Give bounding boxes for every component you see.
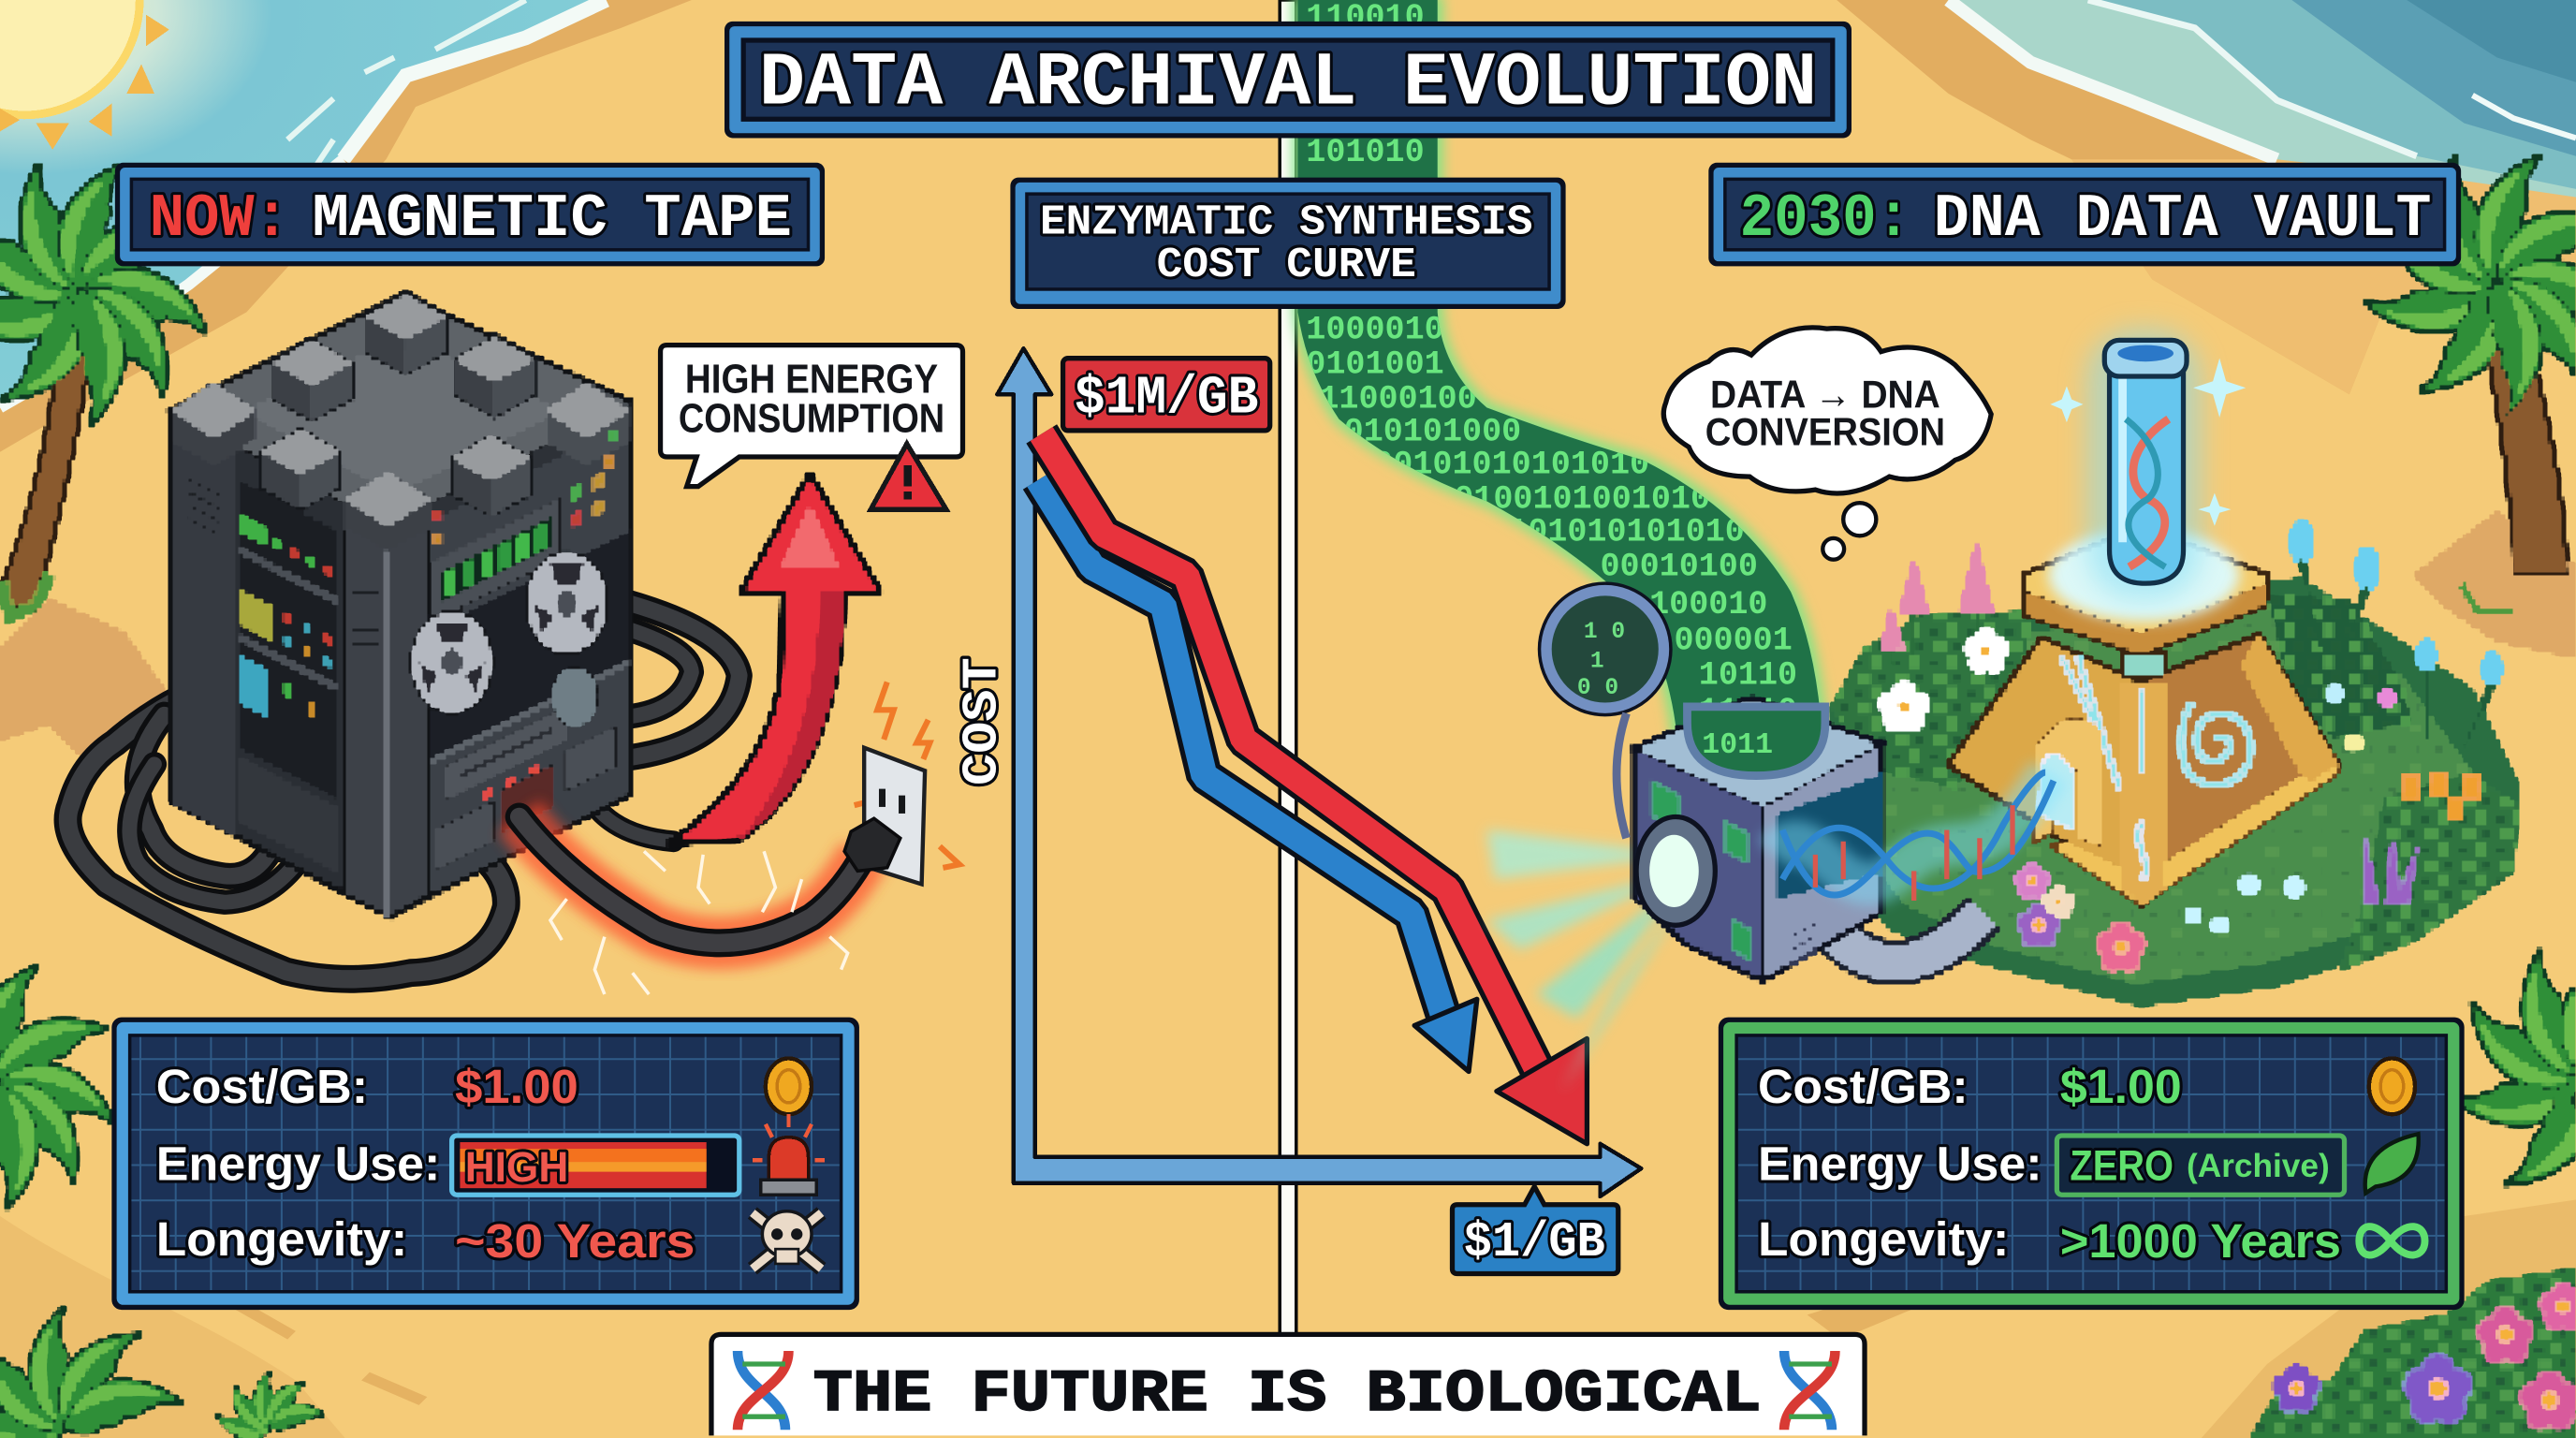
cyan swirl xyxy=(2062,657,2251,879)
chart: cost curve xyxy=(955,348,1641,1273)
header: 2030 dna data vault: DNA DATA VAULT xyxy=(1934,184,2432,254)
arch door xyxy=(2036,718,2101,846)
chart heading: enzymatic synthesis cost curve: ENZYMATIC SYNTHESIS xyxy=(1040,198,1533,246)
hot power cable with glow and wall outlet xyxy=(520,682,959,994)
left face racks xyxy=(172,411,337,888)
magnetic tape server tower xyxy=(172,291,629,916)
energy badge: zero: ZERO xyxy=(2070,1141,2174,1189)
binary data ribbon: 11000100 xyxy=(1319,380,1477,418)
intake ring with data stream: 1011 xyxy=(1702,729,1773,762)
icon: wall outlet xyxy=(844,748,925,884)
binary data ribbon xyxy=(1298,0,1823,766)
icon: siren xyxy=(753,1114,825,1195)
tag: $1/GB: $1/GB xyxy=(1464,1214,1605,1270)
binary data ribbon: 10101010101010 xyxy=(1469,514,1745,551)
golden pedestal xyxy=(1950,529,2338,903)
binary data ribbon: 10110 xyxy=(1699,656,1797,694)
row: cost: Cost/GB: xyxy=(1758,1060,1969,1113)
header: now magnetic tape: MAGNETIC TAPE xyxy=(312,184,792,254)
row: longevity xyxy=(1758,1212,2425,1268)
binary data ribbon: 000001 xyxy=(1674,622,1793,659)
binary data ribbon: 0101001 xyxy=(1306,345,1444,383)
top deck xyxy=(172,296,629,529)
footer banner: the future is biological xyxy=(711,1334,1865,1435)
thought dots xyxy=(1843,503,1876,536)
stat panel: magnetic tape xyxy=(111,1018,859,1310)
light beams from machine lens xyxy=(1486,829,1692,1093)
thought bubble: data to dna conversion: CONVERSION xyxy=(1705,410,1945,454)
energy badge: zero xyxy=(2056,1136,2345,1195)
glowing test tube with dna xyxy=(2049,329,2246,622)
binary data ribbon: 010101000 xyxy=(1344,413,1521,450)
title banner xyxy=(724,22,1852,138)
intake ring with data stream xyxy=(1687,707,1825,776)
header: now magnetic tape xyxy=(115,163,825,266)
icon: infinity xyxy=(2359,1226,2425,1255)
thought bubble: data to dna conversion: DATA → DNA xyxy=(1710,372,1940,416)
sparkles xyxy=(2050,359,2246,526)
energy badge: zero: (Archive) xyxy=(2187,1148,2330,1184)
magnifier scope xyxy=(1540,583,1671,838)
pipe xyxy=(1832,914,1983,962)
sea: top left with sun xyxy=(0,0,607,407)
garden island xyxy=(1832,521,2519,1005)
palm foliage: bottom right xyxy=(2450,939,2576,1211)
header: 2030 dna data vault xyxy=(1708,163,2461,266)
front pillar xyxy=(345,501,429,916)
machine box xyxy=(1634,698,1881,979)
corner pillar tops xyxy=(172,383,629,552)
palm tree: top left xyxy=(0,154,218,772)
flower bush: bottom right xyxy=(2250,1269,2576,1438)
header: now magnetic tape: NOW: xyxy=(150,184,289,254)
flowers xyxy=(1879,542,2479,972)
lens xyxy=(1636,816,1715,925)
palm foliage: bottom left xyxy=(0,956,325,1438)
magnifier scope: 0 0 xyxy=(1577,676,1618,701)
row: longevity: >1000 Years xyxy=(2060,1214,2341,1268)
top plate xyxy=(2026,529,2265,644)
binary data ribbon: 100101010101010 xyxy=(1354,447,1649,484)
tag: $1/GB xyxy=(1453,1186,1618,1273)
icon: electric sparks xyxy=(550,851,848,994)
row: cost: $1.00 xyxy=(2060,1060,2182,1113)
icon: leaf xyxy=(2365,1134,2419,1193)
icon: dna left xyxy=(738,1351,788,1430)
series: blue cost line xyxy=(1038,480,1477,1072)
title banner: DATA ARCHIVAL EVOLUTION xyxy=(759,42,1817,127)
row: longevity xyxy=(156,1211,822,1269)
dna strand inside tube xyxy=(2130,419,2169,567)
icon: coin xyxy=(2369,1058,2415,1114)
row: energy xyxy=(1758,1134,2419,1195)
icon: coin xyxy=(766,1058,812,1114)
binary data ribbon: 1000010 xyxy=(1306,312,1444,349)
series: red cost line xyxy=(1042,433,1587,1144)
centre divider line xyxy=(1280,0,1296,1340)
magnifier scope: 1 xyxy=(1590,650,1604,675)
binary data ribbon: 1010100101001010 xyxy=(1395,480,1710,518)
row: longevity: Longevity: xyxy=(1758,1212,2009,1266)
callout: high energy consumption xyxy=(661,345,962,509)
magnifier scope: 1 0 xyxy=(1584,620,1625,645)
row: cost xyxy=(1758,1058,2415,1114)
callout: high energy consumption: CONSUMPTION xyxy=(679,396,944,442)
row: cost xyxy=(156,1058,812,1114)
row: cost: Cost/GB: xyxy=(156,1060,368,1113)
icon: warning triangle xyxy=(871,444,946,509)
chart heading: enzymatic synthesis cost curve xyxy=(1010,178,1566,309)
emerging dna helix xyxy=(1775,772,2054,901)
base frame xyxy=(2054,756,2338,903)
right face xyxy=(386,403,629,916)
row: energy: Energy Use: xyxy=(1758,1137,2042,1190)
header: 2030 dna data vault: 2030: xyxy=(1740,184,1910,254)
glowing bulbs xyxy=(2185,521,2502,933)
chart axes xyxy=(997,348,1641,1196)
icon: skull and crossbones xyxy=(753,1211,822,1269)
footer banner: the future is biological: THE FUTURE IS BIOLOGICAL xyxy=(813,1360,1761,1428)
thought bubble: data to dna conversion xyxy=(1663,328,1991,560)
tag: $1M/GB: $1M/GB xyxy=(1075,369,1258,430)
binary data ribbon: 11110 xyxy=(1699,693,1797,730)
energy bar: high xyxy=(452,1136,739,1195)
crenellation cubes xyxy=(258,291,537,520)
binary data ribbon: 00010100 xyxy=(1600,548,1758,585)
row: cost: $1.00 xyxy=(455,1060,578,1113)
callout: high energy consumption: HIGH ENERGY xyxy=(685,357,938,403)
icon: sun xyxy=(0,0,169,150)
row: longevity: Longevity: xyxy=(156,1212,407,1266)
energy bar: high: HIGH xyxy=(465,1143,568,1191)
stat panel: dna vault xyxy=(1719,1018,2465,1310)
icon: dna right xyxy=(1784,1351,1835,1430)
row: longevity: ~30 Years xyxy=(455,1214,695,1268)
palm tree: top right xyxy=(2364,145,2576,657)
cables behind server xyxy=(68,603,739,979)
left face xyxy=(172,411,389,916)
bio-conversion machine xyxy=(1540,583,2054,979)
binary data ribbon: 100010 xyxy=(1649,586,1767,624)
binary data ribbon: 10110 xyxy=(1699,728,1797,766)
sea: top right xyxy=(1949,0,2576,198)
row: energy: Energy Use: xyxy=(156,1137,440,1190)
right face controls xyxy=(429,404,629,873)
axis label: cost: COST xyxy=(955,657,1011,785)
binary data ribbon: 110010 xyxy=(1306,0,1425,37)
row: energy xyxy=(156,1114,825,1195)
binary data ribbon: 101010 xyxy=(1306,134,1425,171)
chart heading: enzymatic synthesis cost curve: COST CURVE xyxy=(1157,241,1416,289)
red arrow: energy rising xyxy=(670,477,879,844)
tape reels xyxy=(411,552,607,726)
